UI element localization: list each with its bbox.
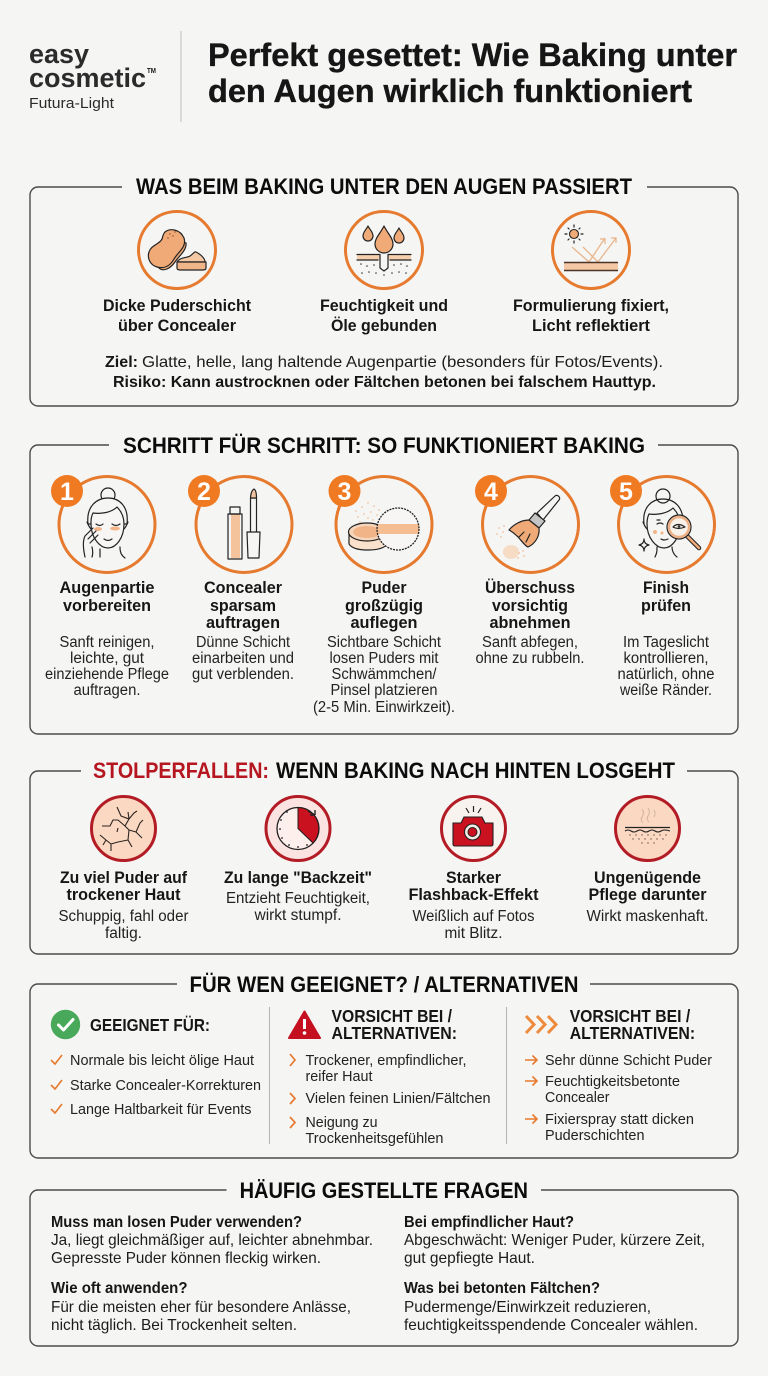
step 5 text: weiße Ränder. [619, 682, 712, 699]
column: vorsicht bei: VORSICHT BEI / [332, 1006, 452, 1026]
text: flashback: mit Blitz. [444, 925, 502, 942]
faq: loser puder: Ja, liegt gleichmäßiger auf, leichter abnehmbar. [51, 1232, 373, 1249]
step 2 badge [188, 475, 220, 507]
step 5 badge: 5 [619, 478, 633, 506]
heading: schritt fuer schritt: SCHRITT FÜR SCHRITT: SO FUNKTIONIERT BAKING [123, 433, 645, 458]
text: zu viel puder: Zu viel Puder auf [60, 868, 187, 887]
step 4 text: vorsichtig [492, 596, 568, 615]
text: ziel und risiko: Ziel: [105, 354, 138, 371]
step 5 badge [610, 475, 642, 507]
icon: warning triangle [289, 1012, 320, 1038]
step 3 text: (2-5 Min. Einwirkzeit). [313, 699, 455, 716]
step 4 badge [475, 475, 507, 507]
heading: stolperfallen: STOLPERFALLEN: [93, 758, 269, 783]
column: alternativen: Fixierspray statt dicken [545, 1111, 694, 1128]
column: vorsicht bei: Neigung zu [306, 1114, 378, 1131]
text: zu viel puder: trockener Haut [66, 885, 181, 904]
icon: timer [266, 796, 330, 860]
heading: stolperfallen: WENN BAKING NACH HINTEN LOSGEHT [276, 758, 675, 783]
step 1 text: Augenpartie [60, 578, 154, 597]
step 1 badge [51, 475, 83, 507]
column: alternativen: Sehr dünne Schicht Puder [545, 1052, 712, 1069]
step 1 text: leichte, gut [70, 650, 145, 667]
step 3 text: auflegen [350, 613, 418, 632]
column: vorsicht bei: Vielen feinen Linien/Fältchen [306, 1090, 490, 1107]
step 4 text: Überschuss [485, 578, 575, 597]
step 4 icon: brush [482, 476, 578, 572]
text: ungenuegende pflege: Ungenügende [594, 868, 701, 887]
step 1 text: auftragen. [74, 682, 140, 699]
text: ungenuegende pflege: Wirkt maskenhaft. [586, 908, 708, 925]
title: den Augen wirklich funktioniert [208, 73, 692, 109]
faq: betonte faeltchen [404, 1280, 698, 1334]
step 2 text [192, 578, 294, 683]
panel: was beim baking passiert [30, 174, 738, 406]
label: formulierung: Formulierung fixiert, [513, 296, 669, 315]
column: vorsicht bei: reifer Haut [306, 1068, 373, 1085]
label: feuchtigkeit: Feuchtigkeit und [320, 296, 448, 315]
label: feuchtigkeit [320, 296, 448, 335]
column: alternativen: ALTERNATIVEN: [570, 1023, 695, 1043]
column: alternativen: Feuchtigkeitsbetonte [545, 1073, 680, 1090]
column: vorsicht bei [289, 1006, 490, 1147]
step 2 text: einarbeiten und [192, 650, 294, 667]
step 5 text: natürlich, ohne [618, 666, 714, 683]
step 2 icon: concealer [196, 476, 292, 572]
step 5 text [618, 578, 714, 699]
column: geeignet fuer [51, 1010, 261, 1118]
icon: skin layer [616, 796, 680, 860]
faq: loser puder: Gepresste Puder können fleckig wirken. [51, 1250, 321, 1267]
step 5 text: Im Tageslicht [623, 634, 710, 651]
column: vorsicht bei: Trockenheitsgefühlen [306, 1130, 444, 1147]
text: ziel und risiko: Glatte, helle, lang haltende Augenpartie (besonders für Fotos/Events). [142, 354, 663, 371]
step 2 text: Dünne Schicht [196, 634, 291, 651]
text: ziel und risiko [105, 354, 663, 391]
text: zu viel puder [58, 868, 188, 942]
text: ungenuegende pflege [586, 868, 708, 925]
step 3 text: losen Puders mit [330, 650, 439, 667]
text: flashback: Starker [446, 868, 501, 887]
column: geeignet fuer: Normale bis leicht ölige Haut [70, 1052, 255, 1069]
logo: Futura-Light [29, 95, 115, 112]
column: geeignet fuer: Starke Concealer-Korrekturen [70, 1077, 261, 1094]
text: zu viel puder: Schuppig, fahl oder [58, 908, 188, 925]
label: dicke puderschicht: über Concealer [118, 316, 236, 335]
faq: wie oft: nicht täglich. Bei Trockenheit selten. [51, 1317, 297, 1334]
logo: cosmetic [29, 63, 146, 93]
label: feuchtigkeit: Öle gebunden [331, 316, 437, 335]
title: Perfekt gesettet: Wie Baking unter [208, 37, 737, 73]
step 1 text: vorbereiten [63, 596, 151, 615]
step 5 icon: face with magnifier [618, 476, 714, 572]
label: dicke puderschicht: Dicke Puderschicht [103, 296, 251, 315]
text: flashback: Flashback-Effekt [408, 885, 539, 904]
step 1 text [45, 578, 169, 699]
step 3 badge: 3 [338, 478, 351, 506]
step 3 text: Puder [362, 578, 407, 597]
faq: empfindliche haut [404, 1214, 705, 1267]
step 2 text: sparsam [210, 596, 276, 615]
column: alternativen: VORSICHT BEI / [570, 1006, 690, 1026]
step 2 text: Concealer [204, 578, 282, 597]
step 3 text: Sichtbare Schicht [327, 634, 442, 651]
title [208, 37, 737, 109]
icon: sponge and cream jar [138, 212, 216, 288]
heading: was beim baking: WAS BEIM BAKING UNTER DEN AUGEN PASSIERT [136, 174, 632, 199]
text: zu lange backzeit: Entzieht Feuchtigkeit, [226, 890, 370, 907]
faq: loser puder [51, 1214, 373, 1267]
label: formulierung [513, 296, 669, 335]
step 5 text: prüfen [641, 596, 691, 615]
step 3 text: großzügig [345, 596, 423, 615]
column: alternativen [525, 1006, 712, 1144]
logo: TM [147, 68, 156, 75]
text: zu lange backzeit: wirkt stumpf. [253, 907, 342, 924]
step 1 text: einziehende Pflege [45, 666, 169, 683]
panel: stolperfallen [30, 758, 738, 954]
faq: wie oft: Wie oft anwenden? [51, 1280, 188, 1297]
logo [29, 39, 156, 112]
text: flashback: Weißlich auf Fotos [412, 908, 535, 925]
step 3 icon: powder and puff [336, 476, 432, 572]
faq: empfindliche haut: gut gepfiegte Haut. [404, 1250, 535, 1267]
column: alternativen: Concealer [545, 1089, 610, 1106]
panel: faq [30, 1178, 738, 1346]
step 2 badge: 2 [197, 478, 211, 506]
heading: fuer wen geeignet: FÜR WEN GEEIGNET? / ALTERNATIVEN [190, 972, 578, 997]
heading: stolperfallen [93, 758, 675, 783]
step 2 text: gut verblenden. [192, 666, 294, 683]
faq: empfindliche haut: Abgeschwächt: Weniger Puder, kürzere Zeit, [404, 1232, 705, 1249]
text: zu viel puder: faltig. [105, 925, 142, 942]
icon: orange chevrons [526, 1016, 556, 1033]
heading: faq: HÄUFIG GESTELLTE FRAGEN [240, 1178, 528, 1203]
column: geeignet fuer: Lange Haltbarkeit für Events [70, 1101, 252, 1118]
step 4 badge: 4 [484, 478, 498, 506]
step 1 icon: face care [59, 476, 155, 572]
label: dicke puderschicht [103, 296, 251, 335]
text: ungenuegende pflege: Pflege darunter [588, 885, 707, 904]
panel: schritt fuer schritt [30, 433, 738, 734]
faq: empfindliche haut: Bei empfindlicher Haut? [404, 1214, 574, 1231]
step 3 text: Pinsel platzieren [330, 682, 438, 699]
panel: fuer wen geeignet [30, 972, 738, 1158]
icon: green check [51, 1010, 80, 1039]
step 1 text: Sanft reinigen, [60, 634, 154, 651]
icon: cracked skin [92, 796, 156, 860]
step 4 text: Sanft abfegen, [482, 634, 578, 651]
faq: betonte faeltchen: Pudermenge/Einwirkzeit reduzieren, [404, 1299, 651, 1316]
step 5 text: kontrollieren, [624, 650, 708, 667]
step 3 text [313, 578, 455, 716]
icon: moisture drops absorbed [346, 212, 422, 288]
text: zu lange backzeit: Zu lange "Backzeit" [224, 868, 372, 887]
faq: loser puder: Muss man losen Puder verwenden? [51, 1214, 302, 1231]
logo: easy [29, 39, 89, 69]
step 2 text: auftragen [206, 613, 280, 632]
icon: camera flash [442, 796, 506, 860]
text: flashback [408, 868, 539, 942]
column: vorsicht bei: ALTERNATIVEN: [332, 1023, 457, 1043]
step 4 text: abnehmen [490, 613, 570, 632]
step 5 text: Finish [643, 578, 689, 597]
column: geeignet fuer: GEEIGNET FÜR: [90, 1015, 210, 1035]
faq: betonte faeltchen: Was bei betonten Fältchen? [404, 1280, 600, 1297]
step 3 text: Schwämmchen/ [332, 666, 437, 683]
faq: wie oft [51, 1280, 351, 1334]
text: ziel und risiko: Risiko: Kann austrocknen oder Fältchen betonen bei falschem Hauttyp. [113, 374, 656, 391]
faq: betonte faeltchen: feuchtigkeitsspendende Concealer wählen. [404, 1317, 698, 1334]
column: alternativen: Puderschichten [545, 1127, 644, 1144]
step 1 badge: 1 [60, 478, 74, 506]
step 3 badge [328, 475, 360, 507]
faq: wie oft: Für die meisten eher für besondere Anlässe, [51, 1299, 351, 1316]
column: vorsicht bei: Trockener, empfindlicher, [306, 1052, 466, 1069]
step 4 text: ohne zu rubbeln. [476, 650, 584, 667]
label: formulierung: Licht reflektiert [532, 316, 650, 335]
text: zu lange backzeit [224, 868, 372, 924]
icon: light reflection [552, 212, 630, 288]
step 4 text [476, 578, 584, 667]
